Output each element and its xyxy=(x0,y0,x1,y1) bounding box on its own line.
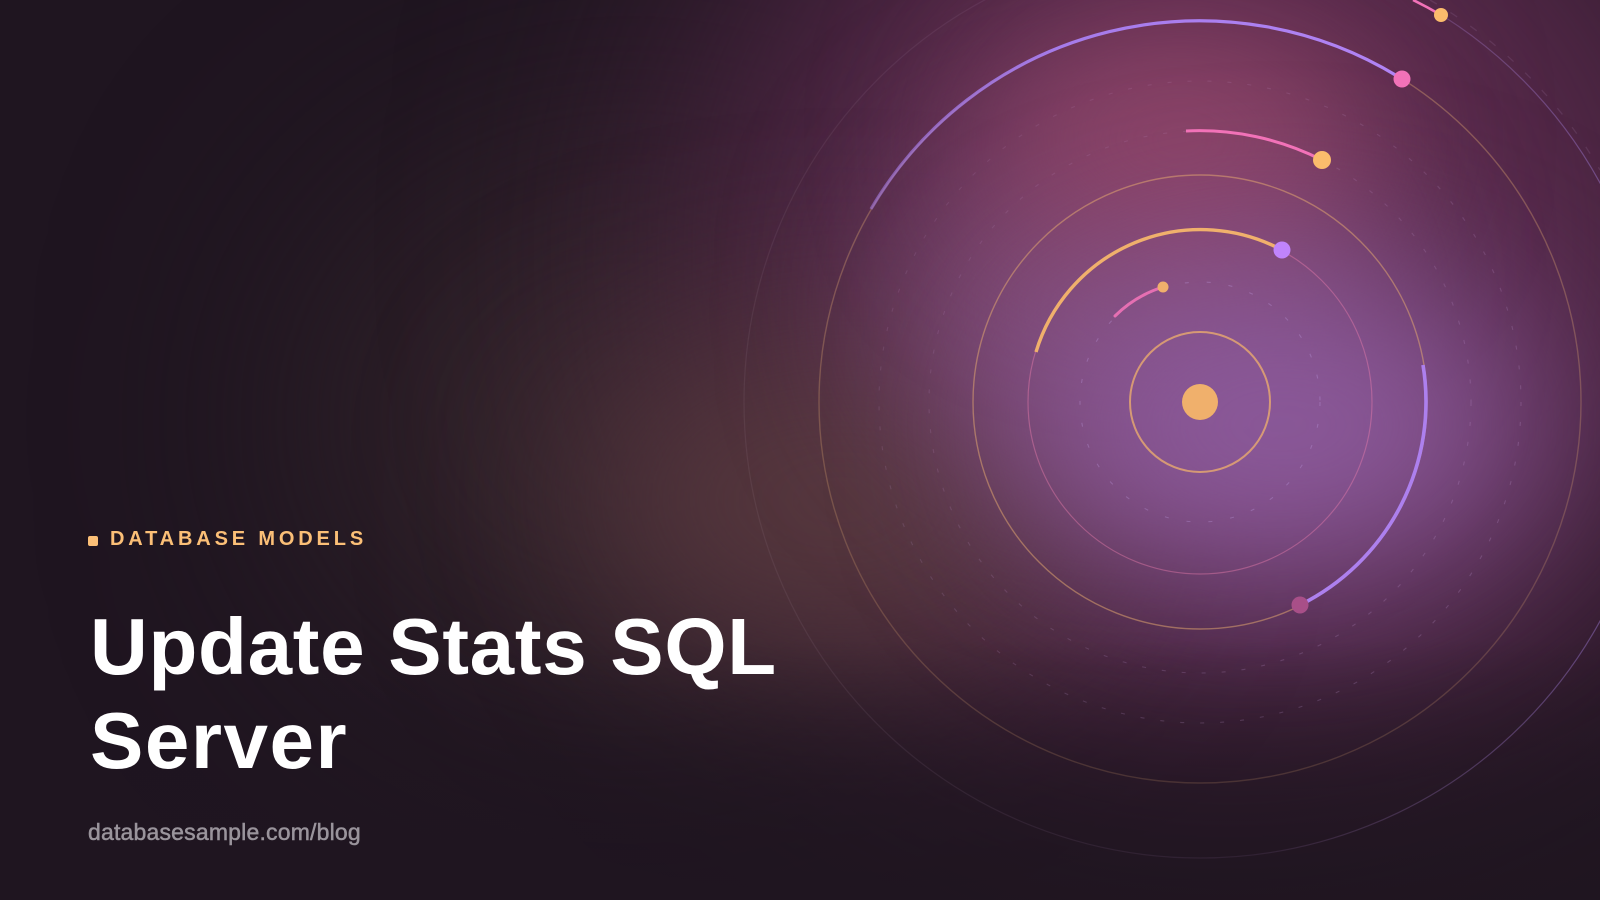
title: Server xyxy=(90,696,348,785)
ring radius 70 xyxy=(1130,332,1270,472)
arc: purple inner with magenta dot xyxy=(1292,365,1426,614)
dashed ring radius 120 xyxy=(1080,282,1320,522)
outer ring xyxy=(744,0,1600,858)
dashed ring radius 271 xyxy=(929,131,1471,673)
ring radius 227 xyxy=(973,175,1427,629)
outer dashed ring xyxy=(1430,0,1600,170)
ring radius 381 xyxy=(819,21,1581,783)
title: Update Stats SQL xyxy=(90,602,777,691)
arc: purple outer with pink dot xyxy=(871,21,1410,209)
dashed ring radius 321 xyxy=(879,81,1521,723)
eyebrow marker xyxy=(88,536,98,546)
ring radius 172 xyxy=(1028,230,1372,574)
arc: orange with purple dot xyxy=(1036,230,1290,352)
arc: top pink with orange dot xyxy=(1413,0,1448,22)
centre dot xyxy=(1182,384,1218,420)
eyebrow text: DATABASE MODELS xyxy=(110,528,367,550)
title xyxy=(90,602,777,785)
source url: databasesample.com/blog xyxy=(88,819,361,845)
arc: small pink with orange dot xyxy=(1115,282,1168,316)
arc: pink with orange dot xyxy=(1186,131,1331,169)
